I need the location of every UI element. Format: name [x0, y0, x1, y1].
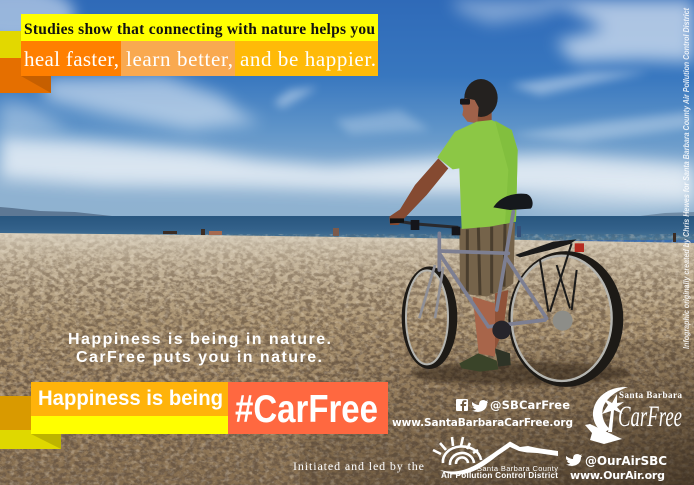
icon: sun and mountains — [433, 437, 558, 475]
banner benefits: learn better, — [126, 47, 233, 71]
front wheel — [402, 266, 457, 369]
background photo: beach — [0, 226, 694, 485]
handle: @OurAirSBC — [585, 454, 667, 468]
top ribbon tab — [0, 31, 51, 93]
frame — [439, 212, 547, 327]
logo text: Santa Barbara — [619, 390, 682, 400]
clouds — [0, 0, 694, 212]
Santa Barbara CarFree social — [392, 398, 573, 429]
Santa Barbara CarFree logo — [585, 387, 682, 444]
tagline: CarFree puts you in nature. — [76, 349, 322, 366]
rear wheel — [508, 251, 623, 387]
banner heading: Studies show that connecting with nature helps you — [24, 21, 375, 38]
rear rack — [515, 239, 577, 257]
icon: twitter — [566, 454, 582, 466]
neck and head — [472, 110, 492, 125]
distant hills — [0, 207, 112, 217]
sand island — [585, 424, 622, 444]
man with bicycle — [389, 79, 630, 387]
drivetrain — [553, 311, 573, 331]
crescent — [593, 387, 628, 433]
website: www.OurAir.org — [570, 469, 665, 482]
icon: twitter — [472, 400, 488, 412]
people on the beach — [163, 226, 676, 242]
district label: Air Pollution Control District — [441, 471, 558, 480]
top banner — [21, 14, 378, 76]
banner text: Happiness is being — [38, 387, 223, 410]
banner benefits: heal faster, — [24, 47, 119, 71]
handlebar — [393, 221, 458, 227]
county label: Santa Barbara County — [477, 464, 558, 473]
hashtag: #CarFree — [235, 388, 378, 431]
Air Pollution Control District logo — [433, 437, 558, 480]
bike saddle — [493, 194, 533, 210]
arm — [389, 158, 448, 225]
website: www.SantaBarbaraCarFree.org — [392, 417, 573, 429]
initiated by: Initiated and led by the — [293, 459, 424, 473]
icon: facebook — [456, 399, 468, 411]
bottom banner — [31, 382, 388, 434]
background photo: sky — [0, 0, 694, 217]
banner benefits — [24, 47, 376, 71]
Our Air social — [566, 454, 667, 482]
shadow — [410, 362, 630, 385]
shirt — [437, 120, 518, 229]
palm — [602, 394, 624, 432]
tagline — [68, 331, 331, 366]
bottom ribbon tab — [0, 396, 61, 449]
background photo: sea — [0, 216, 694, 240]
shoes — [459, 353, 498, 372]
shorts — [459, 223, 515, 297]
banner benefits: and be happier. — [240, 47, 376, 71]
legs — [473, 297, 495, 357]
tagline: Happiness is being in nature. — [68, 331, 331, 348]
social handle: @SBCarFree — [490, 398, 570, 412]
